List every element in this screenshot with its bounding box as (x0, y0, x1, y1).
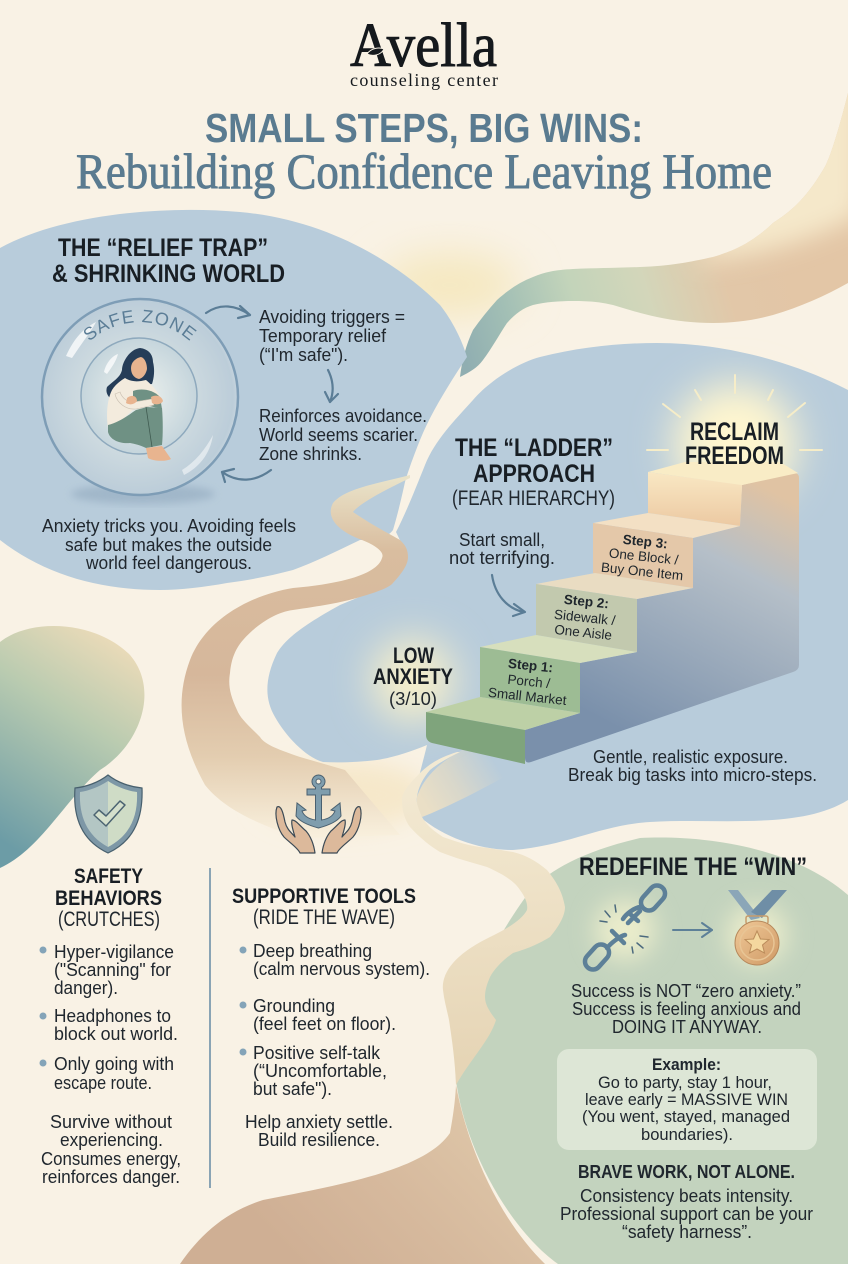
base riser (426, 712, 525, 764)
text: help anxiety settle (245, 1112, 393, 1150)
decorative winding band lower (180, 1085, 545, 1264)
text: brave work: Professional support can be your (560, 1204, 813, 1224)
step 2 label: One Aisle (554, 622, 613, 643)
step 2 riser (536, 584, 637, 652)
title line one: SMALL STEPS, BIG WINS: (205, 105, 643, 151)
base tread (426, 697, 580, 730)
panel: safety behaviors (40, 775, 181, 1187)
illustration: bubble with seated woman (40, 298, 240, 506)
rays: freedom (647, 375, 822, 450)
logo leaf (367, 48, 384, 55)
leg line (146, 407, 152, 447)
list: supportive tools (240, 941, 430, 1099)
text: gentle exposure (568, 747, 817, 785)
list: safety behaviors: escape route. (54, 1073, 152, 1093)
text: anxiety tricks you: world feel dangerous. (85, 553, 252, 573)
callout: example: (You went, stayed, managed (582, 1107, 790, 1126)
logo subtitle: counseling center (350, 70, 498, 90)
text: brave work: BRAVE WORK, NOT ALONE. (578, 1162, 795, 1182)
text: brave work: Consistency beats intensity. (580, 1186, 793, 1206)
SAFE ZONE label: SAFE ZONE (84, 310, 196, 340)
arrow: relief loop top (206, 306, 250, 318)
step 3 tread (593, 513, 740, 538)
icon: anchor in hands (276, 775, 361, 853)
step 4 tread (648, 462, 798, 485)
list: supportive tools: (calm nervous system). (253, 959, 430, 979)
text: survive without experiencing (41, 1112, 181, 1187)
list: safety behaviors (40, 942, 178, 1093)
step 3 label: Step 3: (622, 532, 668, 551)
heading: ladder approach: APPROACH (473, 460, 595, 488)
list: safety behaviors: block out world. (54, 1024, 178, 1044)
arrow: relief loop down (325, 370, 338, 402)
decorative right blue blob (267, 343, 848, 850)
knee (133, 389, 162, 409)
text: help anxiety settle: Help anxiety settle. (245, 1112, 393, 1132)
text: avoiding triggers: Temporary relief (259, 326, 387, 346)
text: reinforces avoidance: Reinforces avoidance. (259, 406, 427, 426)
text: reinforces avoidance: World seems scarier. (259, 425, 418, 445)
right hand (322, 807, 361, 853)
step 2 tread (536, 573, 693, 599)
text: start small: not terrifying. (449, 548, 555, 568)
text: survive without experiencing: reinforces danger. (42, 1167, 180, 1187)
list: supportive tools: but safe"). (253, 1079, 332, 1099)
callout: example: leave early = MASSIVE WIN (585, 1090, 788, 1109)
panel: supportive tools (232, 775, 430, 1150)
decorative wave ribbon (460, 93, 848, 377)
panel: relief trap (40, 234, 427, 573)
panel background: redefine the win (456, 838, 848, 1264)
step 2 label (552, 591, 618, 643)
arrow: to step two (492, 575, 525, 616)
hands (126, 396, 163, 404)
text: success definition: DOING IT ANYWAY. (612, 1017, 762, 1037)
label: reclaim freedom: RECLAIM (690, 418, 779, 446)
text: anxiety tricks you (42, 516, 296, 573)
text: avoiding triggers: (“I'm safe"). (259, 345, 348, 365)
heading: safety behaviors: BEHAVIORS (55, 887, 162, 910)
icon: medal with star (728, 890, 787, 965)
staircase illustration (426, 462, 799, 764)
text: avoiding triggers: Avoiding triggers = (259, 307, 405, 327)
stair side (525, 473, 799, 762)
panel: redefine the win (557, 853, 817, 1242)
arrow: relief loop back (222, 469, 271, 482)
label: low anxiety: LOW (393, 643, 434, 668)
step 1 riser (480, 647, 580, 713)
heading: safety behaviors (55, 865, 162, 931)
heading: ladder approach: THE “LADDER” (455, 434, 613, 462)
step 1 label: Small Market (487, 685, 567, 708)
glow: chain and medal (595, 900, 787, 965)
text: avoiding triggers (259, 307, 405, 365)
text: success definition: Success is feeling anxious and (572, 999, 801, 1019)
face (131, 357, 147, 379)
icon: broken chain (582, 882, 668, 973)
panel background: relief trap (0, 210, 467, 590)
icon: shield with check (75, 775, 142, 853)
logo wordmark: Avella (350, 12, 497, 80)
panel: ladder approach (371, 375, 822, 785)
list: supportive tools: (feel feet on floor). (253, 1014, 396, 1034)
heading: safety behaviors: SAFETY (74, 865, 143, 888)
text: brave work (560, 1162, 813, 1242)
callout: example (557, 1049, 817, 1150)
logo (350, 12, 498, 90)
label: low anxiety: ANXIETY (373, 664, 453, 689)
text: start small (449, 530, 555, 568)
anchor (296, 775, 341, 828)
decorative winding band upper (402, 752, 565, 1085)
torso (107, 378, 160, 428)
glow: low anxiety (371, 638, 455, 722)
list: safety behaviors: Headphones to (54, 1006, 171, 1026)
column divider (209, 868, 211, 1188)
text: anxiety tricks you: Anxiety tricks you. Avoiding feels (42, 516, 296, 536)
list: safety behaviors: danger). (54, 978, 118, 998)
heading: supportive tools (232, 885, 416, 929)
label: low anxiety (373, 643, 453, 709)
label: reclaim freedom: FREEDOM (685, 442, 784, 470)
text: reinforces avoidance: Zone shrinks. (259, 444, 362, 464)
step 1 label: Porch / (507, 672, 551, 691)
heading: supportive tools: (RIDE THE WAVE) (253, 906, 395, 929)
anchor ring hole (316, 779, 321, 784)
step 3 label (600, 530, 687, 583)
decorative tan path (182, 475, 410, 838)
step 3 riser (593, 523, 693, 588)
step 3 label: Buy One Item (600, 560, 684, 583)
decorative peach glow (260, 761, 430, 829)
heading: supportive tools: SUPPORTIVE TOOLS (232, 885, 416, 908)
decorative left blob (0, 626, 144, 868)
text: success definition: Success is NOT “zero anxiety.” (571, 981, 801, 1001)
text: reinforces avoidance (259, 406, 427, 464)
text: help anxiety settle: Build resilience. (258, 1130, 380, 1150)
text: gentle exposure: Break big tasks into micro-steps. (568, 765, 817, 785)
step 2 label: Sidewalk / (553, 607, 616, 628)
heading: ladder approach (452, 434, 615, 510)
heading: safety behaviors: (CRUTCHES) (58, 908, 160, 931)
text: survive without experiencing: Consumes energy, (41, 1149, 181, 1169)
step 1 tread (480, 635, 637, 663)
left hand (276, 807, 315, 853)
step 3 label: One Block / (608, 545, 679, 568)
list: supportive tools: Grounding (253, 996, 335, 1016)
title (76, 105, 772, 199)
label: low anxiety: (3/10) (389, 689, 437, 709)
arrow: chain to medal (673, 923, 712, 937)
label: reclaim freedom (685, 418, 784, 470)
title line two: Rebuilding Confidence Leaving Home (76, 143, 772, 199)
legs (108, 407, 163, 448)
step 1 label (487, 654, 571, 708)
callout: example: boundaries). (641, 1125, 733, 1144)
text: success definition (571, 981, 801, 1037)
heading: relief trap: & SHRINKING WORLD (52, 260, 285, 288)
text: anxiety tricks you: safe but makes the outside (65, 535, 272, 555)
callout: example: Example: (652, 1055, 721, 1074)
text: brave work: “safety harness”. (622, 1222, 752, 1242)
list: supportive tools: Deep breathing (253, 941, 372, 961)
decorative ribbon sand highlight (704, 94, 848, 266)
heading: ladder approach: (FEAR HIERARCHY) (452, 487, 615, 510)
heading: relief trap: THE “RELIEF TRAP” (58, 234, 268, 262)
step 4 riser (648, 472, 742, 526)
hair (106, 348, 154, 398)
glow: freedom (673, 383, 797, 507)
list: safety behaviors: Only going with (54, 1054, 174, 1074)
callout: example: Go to party, stay 1 hour, (598, 1073, 772, 1092)
text: start small: Start small, (459, 530, 545, 550)
folded arms (115, 392, 154, 409)
text: survive without experiencing: Survive without (50, 1112, 172, 1132)
decorative shading inside band loop (417, 745, 520, 817)
heading: redefine the win: REDEFINE THE “WIN” (579, 853, 807, 881)
step 1 label: Step 1: (507, 656, 554, 675)
heading: relief trap (52, 234, 285, 288)
list: supportive tools: Positive self-talk (253, 1043, 381, 1063)
decorative warm glow (380, 253, 520, 317)
text: gentle exposure: Gentle, realistic exposure. (593, 747, 788, 767)
list: safety behaviors: ("Scanning" for (54, 960, 171, 980)
list: supportive tools: (“Uncomfortable, (253, 1061, 387, 1081)
list: safety behaviors: Hyper-vigilance (54, 942, 174, 962)
step 2 label: Step 2: (563, 592, 610, 611)
feet (146, 446, 171, 461)
text: survive without experiencing: experiencing. (60, 1130, 163, 1150)
